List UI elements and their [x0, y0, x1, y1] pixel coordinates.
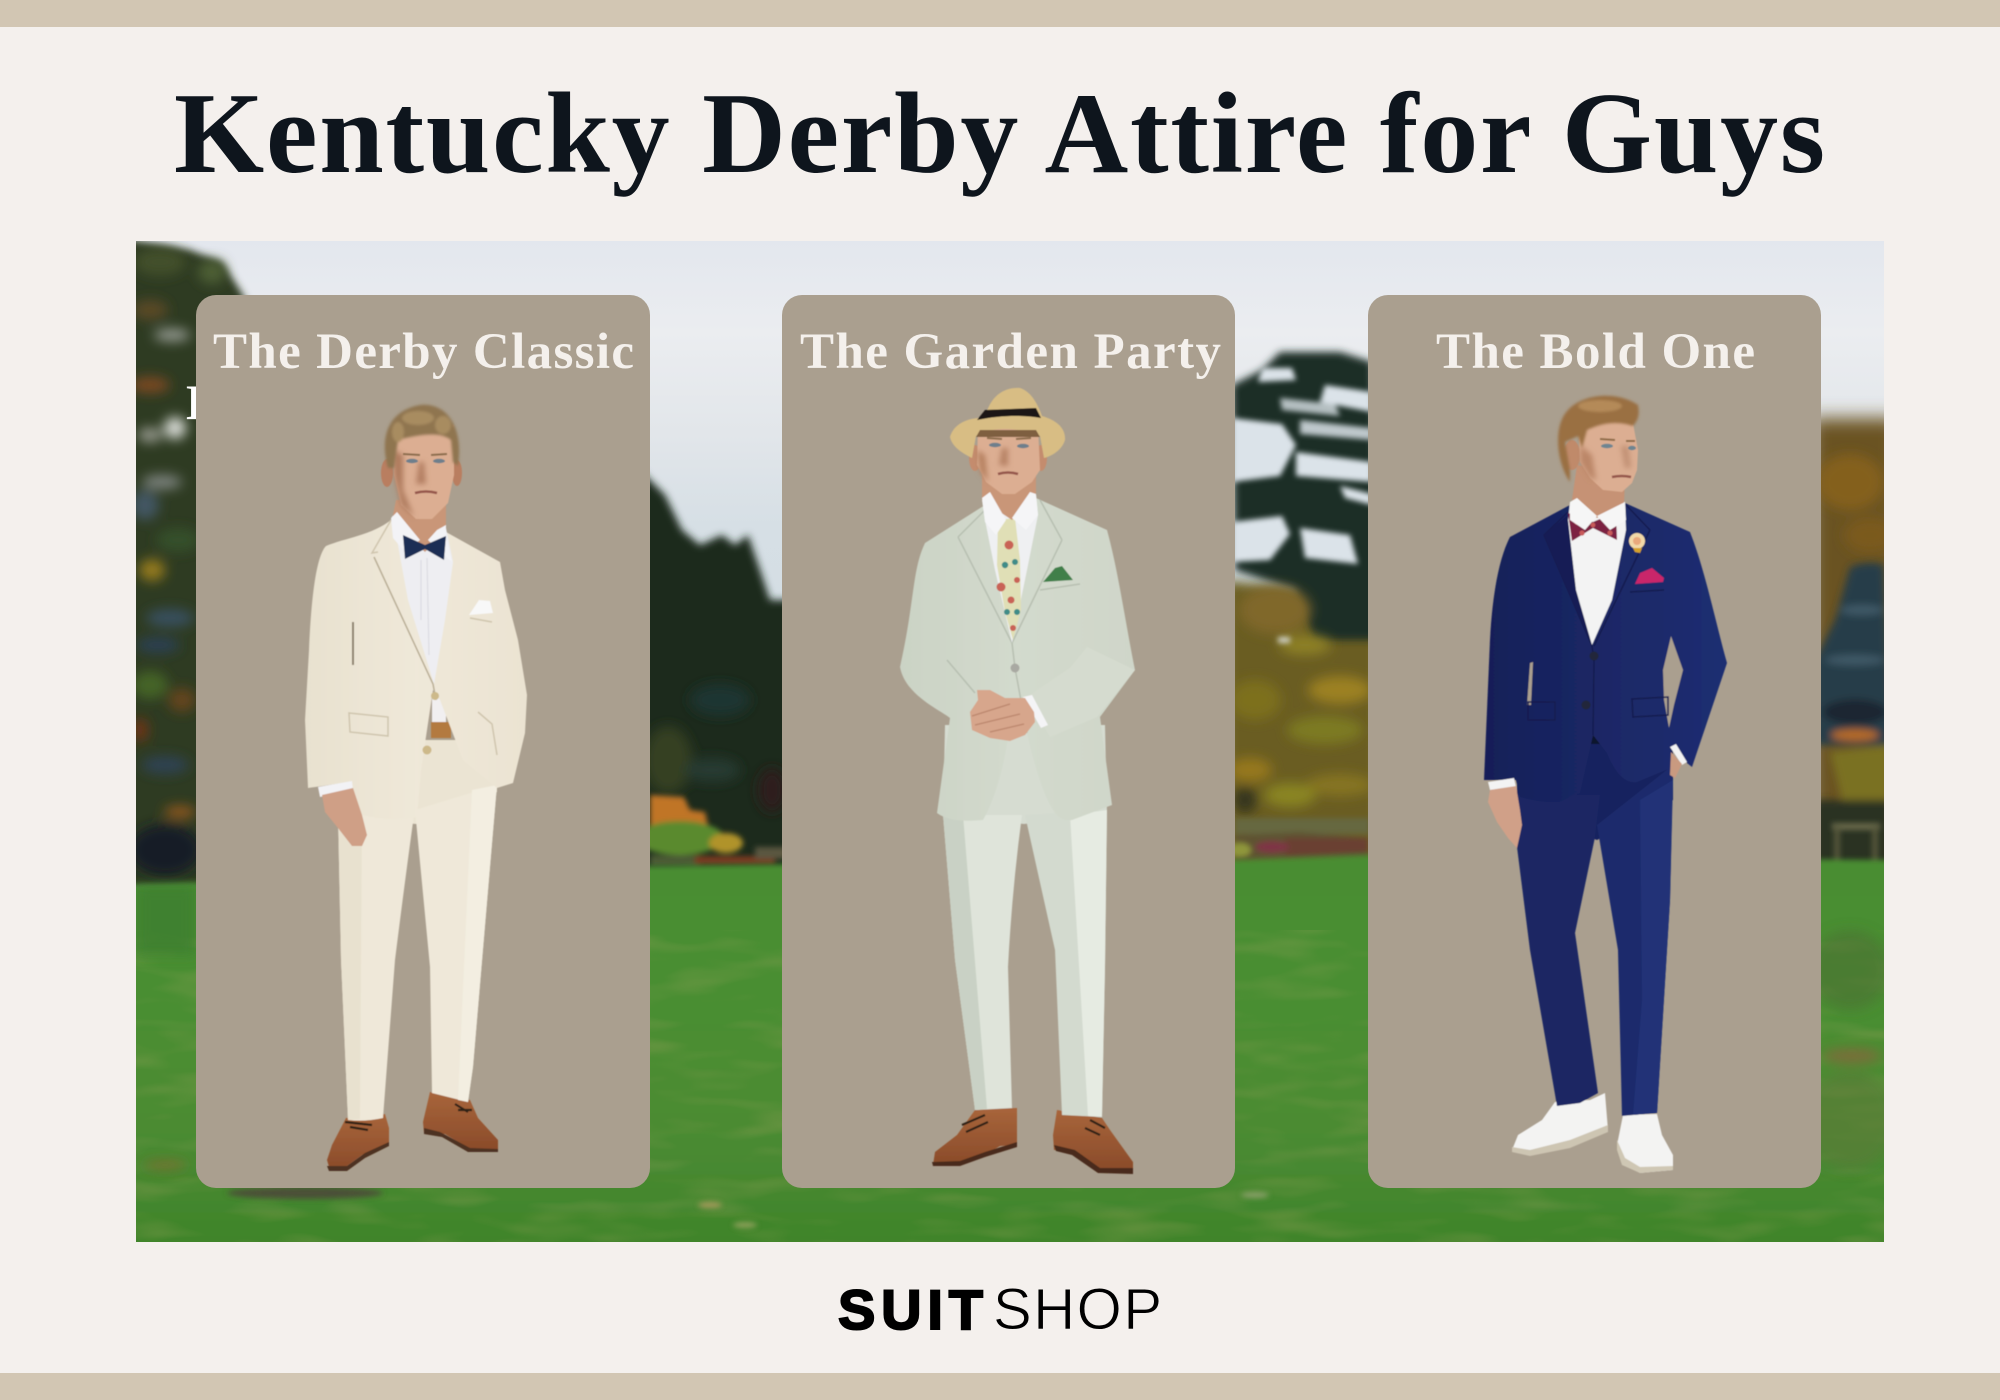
- pocket square: [469, 600, 493, 615]
- card background: [196, 295, 650, 1188]
- lawn: [130, 855, 1895, 1250]
- shirt: [392, 516, 453, 684]
- cuff: [1023, 695, 1048, 728]
- belt: [1589, 722, 1602, 744]
- arm gap right: [1663, 636, 1683, 728]
- collar: [391, 512, 452, 562]
- hair: [1558, 396, 1639, 482]
- logo: SUITSHOP: [838, 1277, 1162, 1342]
- collar: [982, 492, 1038, 535]
- bow tie: [1568, 512, 1617, 541]
- belt and shirt tail: [431, 696, 451, 738]
- face features: [1580, 439, 1636, 480]
- shoes: [327, 1092, 498, 1171]
- card background: [1368, 295, 1821, 1188]
- title: Kentucky Derby Attire for Guys: [174, 70, 1825, 198]
- straw hat: [950, 388, 1065, 458]
- bow tie: [403, 535, 446, 560]
- jacket: [305, 520, 527, 819]
- panel: The Bold One: [1368, 295, 1821, 1188]
- necktie: [996, 518, 1021, 640]
- card background: [782, 295, 1235, 1188]
- trousers: [943, 725, 1107, 1117]
- pocket square: [1043, 566, 1073, 582]
- neck: [1572, 465, 1625, 518]
- jacket: [1484, 503, 1727, 802]
- face features: [977, 438, 1031, 482]
- hand in pocket: [1670, 752, 1682, 778]
- right-middle pine and autumn trees: [1235, 572, 1368, 864]
- face: [1578, 418, 1638, 492]
- hidden letter behind first card: D: [186, 374, 222, 430]
- clasped hands: [970, 690, 1035, 741]
- finger lines: [972, 704, 1024, 732]
- figure: cream suit with navy bow tie: [305, 405, 527, 1171]
- jacket buttons: [422, 692, 439, 754]
- middle trees: [650, 471, 782, 870]
- face shading and features: [393, 450, 447, 517]
- figure: sage suit with straw hat: [900, 388, 1135, 1174]
- hand: [322, 788, 367, 846]
- right sleeve overlap: [1027, 647, 1135, 737]
- ears: [969, 445, 1047, 471]
- bottom band: [0, 1373, 2000, 1400]
- ear: [1564, 440, 1580, 470]
- jacket details: [1528, 505, 1668, 735]
- jacket details: [349, 520, 497, 755]
- lapel shadow: [1544, 515, 1592, 646]
- logo light part: SHOP: [993, 1277, 1162, 1342]
- trousers: [338, 740, 497, 1121]
- card heading: The Bold One: [1436, 324, 1755, 380]
- collar: [1570, 498, 1626, 530]
- lapel pin: [1629, 533, 1645, 553]
- card heading: The Garden Party: [800, 324, 1221, 380]
- shoes: [932, 1108, 1133, 1174]
- figure: navy suit with white shoes: [1484, 396, 1727, 1173]
- logo bold part: SUIT: [838, 1278, 983, 1341]
- top band: [0, 0, 2000, 27]
- face: [977, 425, 1040, 494]
- jacket button: [1010, 664, 1020, 672]
- shirt placket: [421, 558, 429, 655]
- hair: [385, 405, 459, 468]
- background photo: blurred lawn, trees and sky: [120, 238, 1900, 1250]
- hand: [1488, 786, 1522, 848]
- shirt: [1568, 502, 1626, 645]
- cuff left: [1488, 778, 1516, 790]
- arm gap left: [1527, 662, 1533, 705]
- right edge trees: [1821, 402, 1884, 856]
- panel: The Derby Classic: [196, 295, 650, 1188]
- neck: [392, 500, 446, 552]
- jacket: [900, 498, 1135, 821]
- face: [393, 425, 454, 519]
- jacket buttons: [1582, 652, 1598, 710]
- white shoes: [1512, 1093, 1673, 1173]
- shirt: [982, 495, 1038, 643]
- pocket square: [1635, 568, 1664, 584]
- panel: The Garden Party: [782, 295, 1235, 1188]
- cuff: [318, 781, 353, 797]
- card heading: The Derby Classic: [213, 324, 634, 380]
- cuff right: [1670, 744, 1687, 765]
- jacket sleeves and lines: [947, 500, 1080, 733]
- neck: [982, 470, 1036, 520]
- ears: [381, 459, 462, 487]
- trousers: [1517, 720, 1673, 1116]
